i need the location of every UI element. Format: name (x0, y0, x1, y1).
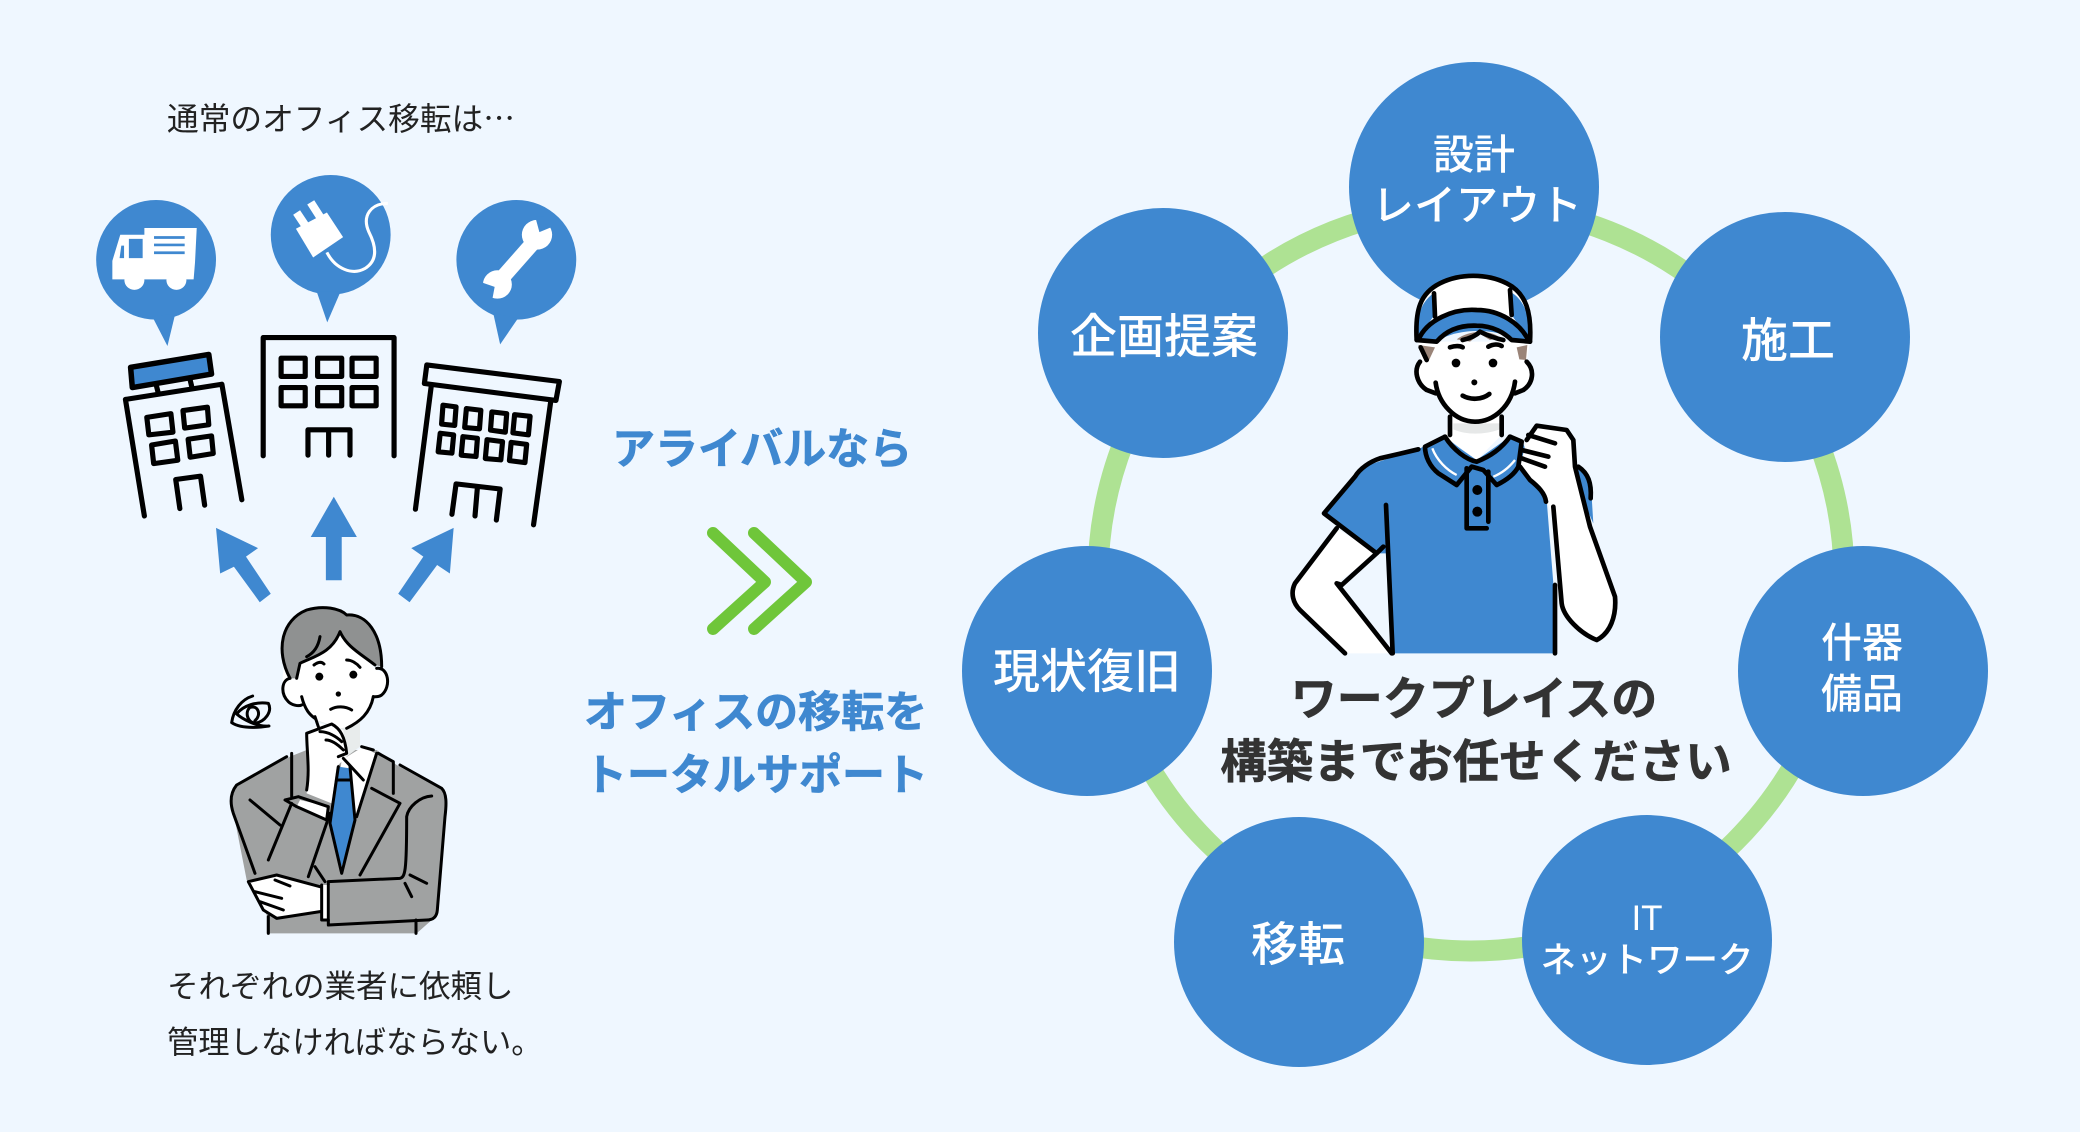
center message (1220, 673, 1732, 788)
circle: design layout: レイアウト (1372, 182, 1582, 229)
center message: 構築までお任せください (1220, 736, 1732, 788)
circle: IT network (1522, 815, 1772, 1065)
icon: plug bubble (271, 175, 391, 322)
icon: truck bubble (96, 200, 216, 346)
icon: double chevron (713, 533, 806, 629)
left caption: 管理しなければならない。 (167, 1025, 543, 1060)
building: left (125, 354, 242, 516)
icon: wrench bubble (456, 200, 576, 344)
circle: furniture (1738, 546, 1988, 796)
circle: restoration: 現状復旧 (993, 645, 1181, 698)
left caption (167, 968, 543, 1060)
circle: relocation: 移転 (1251, 918, 1345, 971)
circle: restoration (962, 546, 1212, 796)
service ring (1098, 205, 1844, 951)
circle: relocation (1174, 817, 1424, 1067)
circle: IT network: IT (1631, 899, 1663, 938)
center heading: アライバルなら (612, 426, 912, 474)
circle: IT network: ネットワーク (1540, 940, 1754, 980)
center heading (584, 426, 928, 800)
arrow: left (216, 528, 271, 602)
circle: planning: 企画提案 (1070, 310, 1258, 363)
circle: design layout (1349, 62, 1599, 312)
illustration: worried businessman (231, 608, 447, 933)
circle: planning (1038, 208, 1288, 458)
arrow: right (398, 528, 454, 602)
circle: design layout: 設計 (1433, 132, 1515, 178)
circle: construction: 施工 (1741, 314, 1835, 367)
service icons and buildings (96, 175, 576, 602)
building: right (415, 365, 559, 525)
arrow: up (311, 497, 357, 580)
center heading: オフィスの移転を (584, 689, 927, 737)
center heading: トータルサポート (584, 752, 928, 800)
building: center (263, 338, 394, 456)
circle: furniture: 什器 (1821, 620, 1903, 666)
circle: construction (1660, 212, 1910, 462)
left caption: それぞれの業者に依頼し (167, 968, 514, 1004)
circle: furniture: 備品 (1821, 671, 1903, 717)
illustration: worker in blue polo (1293, 276, 1615, 653)
icon: worry scribble (232, 696, 270, 727)
left intro text: 通常のオフィス移転は… (167, 94, 515, 140)
center message: ワークプレイスの (1291, 673, 1657, 725)
service circles (962, 62, 1988, 1067)
